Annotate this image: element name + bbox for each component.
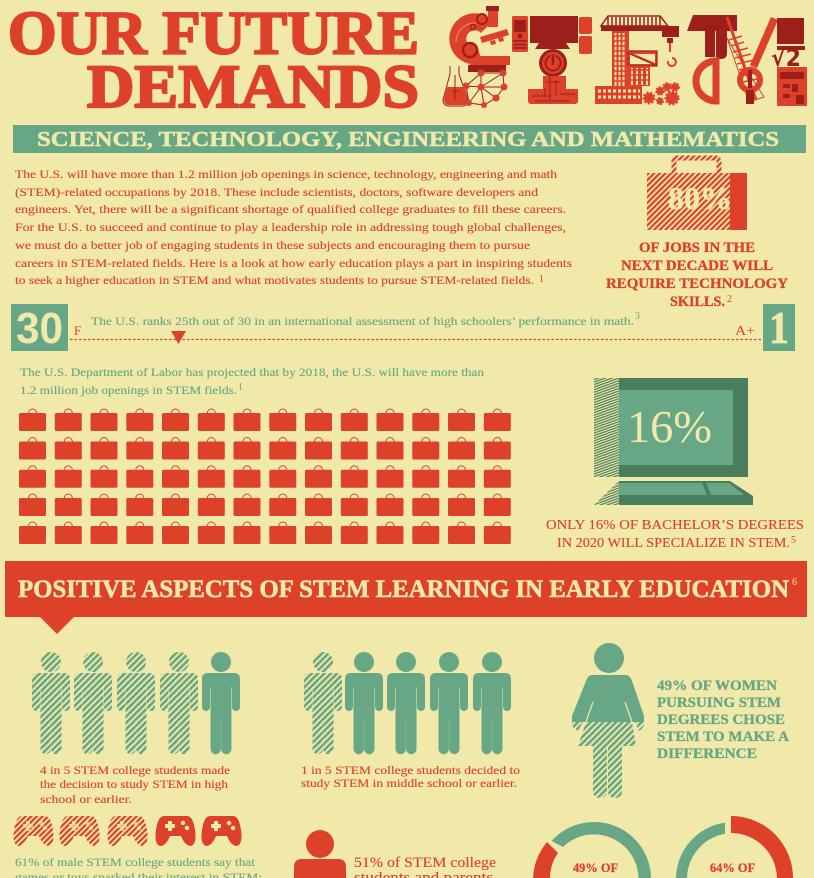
pictogram: briefcases for job openings: [19, 409, 511, 544]
intro paragraph: careers in STEM-related fields. Here is a look at how early education plays a part in inspiring students: [15, 256, 572, 270]
intro paragraph: The U.S. will have more than 1.2 million job openings in science, technology, engineering and math: [15, 167, 557, 181]
marker: position 25th: [171, 331, 186, 344]
icon: briefcase with 80%: [647, 158, 747, 230]
text: 4 in 5 caption: school or earlier.: [40, 792, 132, 806]
text: technology skills statement: REQUIRE TECHNOLOGY: [606, 276, 789, 292]
text: 51% caption: [354, 855, 496, 878]
rank box: 1: 1: [769, 302, 789, 353]
ranking caption: The U.S. ranks 25th out of 30 in an international assessment of high schoolers’ performance in math.: [91, 314, 634, 328]
letter T: phone, monitor and circuit board: [512, 16, 592, 104]
pictogram: 1 of 5 people hatched: [304, 652, 511, 754]
section banner: positive aspects of STEM learning: 6: [792, 577, 797, 588]
donut chart: 64%: [676, 816, 793, 878]
job openings caption: 1: [238, 382, 243, 393]
intro paragraph: (STEM)-related occupations by 2018. These include scientists, doctors, software developers and: [15, 185, 538, 199]
intro paragraph: [15, 167, 572, 287]
text: technology skills statement: 2: [727, 294, 732, 305]
letter M: pi, protractor, pencil, compass, cube, root sign and calculator: √2: [771, 44, 801, 72]
icon: briefcase with 80%: 80%: [668, 180, 732, 216]
banner: science, technology, engineering and mathematics: SCIENCE, TECHNOLOGY, ENGINEERING AND MATHEMATICS: [37, 127, 779, 151]
text: technology skills statement: NEXT DECADE WILL: [621, 258, 773, 274]
text: women statement: DEGREES CHOSE: [657, 712, 785, 728]
donut chart: 49%: 49% OF: [573, 861, 618, 875]
job openings caption: [20, 365, 484, 397]
text: 61% caption: [15, 855, 262, 878]
letter E: crane and building with gears: [595, 16, 679, 104]
donut chart: 64%: 64% OF: [710, 861, 755, 875]
title: our future demands: [8, 0, 419, 121]
rank box: 30: 30: [16, 304, 63, 353]
illustration: STEM lettering built from tools: [443, 6, 807, 108]
section banner: positive aspects of STEM learning: [5, 561, 807, 634]
text: 4 in 5 caption: the decision to study STEM in high: [40, 777, 228, 791]
text: technology skills statement: SKILLS.: [670, 294, 725, 310]
panel: game controllers, 61% of male students: [14, 816, 262, 878]
icon: laptop with 16%: 16%: [627, 401, 712, 452]
text: women statement: DIFFERENCE: [657, 746, 757, 762]
intro paragraph: to seek a higher education in STEM and what motivates students to pursue STEM-related fields.: [15, 273, 534, 287]
text: technology skills statement: [606, 240, 789, 310]
intro paragraph: engineers. Yet, there will be a significant shortage of qualified college graduates to fill these careers.: [15, 202, 566, 216]
letter S: microscope, flask and network: [443, 6, 510, 108]
text: 1 in 5 caption: 1 in 5 STEM college students decided to: [301, 763, 520, 777]
ranking caption: 3: [635, 311, 640, 322]
text: 61% caption: 61% of male STEM college students say that: [15, 855, 256, 869]
icon row: game controllers: [14, 816, 242, 846]
section banner: positive aspects of STEM learning: POSITIVE ASPECTS OF STEM LEARNING IN EARLY EDUCATION: [18, 576, 789, 603]
ranking scale: US 25th of 30 in math: A+: [735, 324, 755, 339]
banner: science, technology, engineering and mathematics: [13, 125, 806, 153]
text: 16% of bachelor's degrees: 5: [791, 535, 796, 546]
title: our future demands: DEMANDS: [87, 54, 419, 121]
text: 4 in 5 caption: 4 in 5 STEM college students made: [40, 763, 230, 777]
text: women statement: PURSUING STEM: [657, 695, 781, 711]
job openings caption: 1.2 million job openings in STEM fields.: [20, 383, 237, 397]
job openings caption: The U.S. Department of Labor has projected that by 2018, the U.S. will have more than: [20, 365, 484, 379]
panel: 1 in 5 decided in middle school: [301, 652, 520, 790]
intro paragraph: For the U.S. to succeed and continue to play a leadership role in addressing tough global challenges,: [15, 220, 566, 234]
intro paragraph: we must do a better job of engaging students in these subjects and encouraging them to pursue: [15, 238, 530, 252]
intro paragraph: 1: [539, 274, 544, 285]
panel: 49% of women make a difference: [572, 643, 790, 798]
text: 1 in 5 caption: study STEM in middle school or earlier.: [301, 776, 517, 790]
panel: 4 in 5 decided in high school: [32, 652, 240, 806]
text: technology skills statement: OF JOBS IN THE: [639, 240, 755, 256]
text: women statement: 49% OF WOMEN: [657, 678, 778, 694]
title: our future demands: OUR FUTURE: [8, 0, 419, 68]
donut chart: 49%: [533, 822, 651, 878]
text: 16% of bachelor's degrees: ONLY 16% OF BACHELOR’S DEGREES: [546, 518, 804, 533]
panel: 51% of students and parents: [294, 830, 496, 878]
icon: red person: [294, 830, 346, 878]
pictogram: 4 of 5 people hatched: [32, 652, 240, 754]
text: women statement: [657, 678, 790, 762]
text: 4 in 5 caption: [40, 763, 230, 806]
letter M: pi, protractor, pencil, compass, cube, root sign and calculator: [687, 15, 807, 106]
ranking scale: US 25th of 30 in math: F: [74, 323, 81, 338]
text: 16% of bachelor's degrees: IN 2020 WILL SPECIALIZE IN STEM.: [557, 536, 790, 551]
text: 16% of bachelor's degrees: [546, 518, 804, 551]
text: women statement: STEM TO MAKE A: [657, 729, 790, 745]
ranking scale: US 25th of 30 in math: [11, 302, 795, 353]
icon: woman figure partly hatched: [572, 643, 644, 798]
text: 1 in 5 caption: [301, 763, 520, 790]
text: 51% caption: 51% of STEM college: [354, 855, 496, 871]
stat panel: 80% of jobs need technology skills: [606, 158, 789, 310]
icon: laptop with 16%: [594, 378, 753, 505]
